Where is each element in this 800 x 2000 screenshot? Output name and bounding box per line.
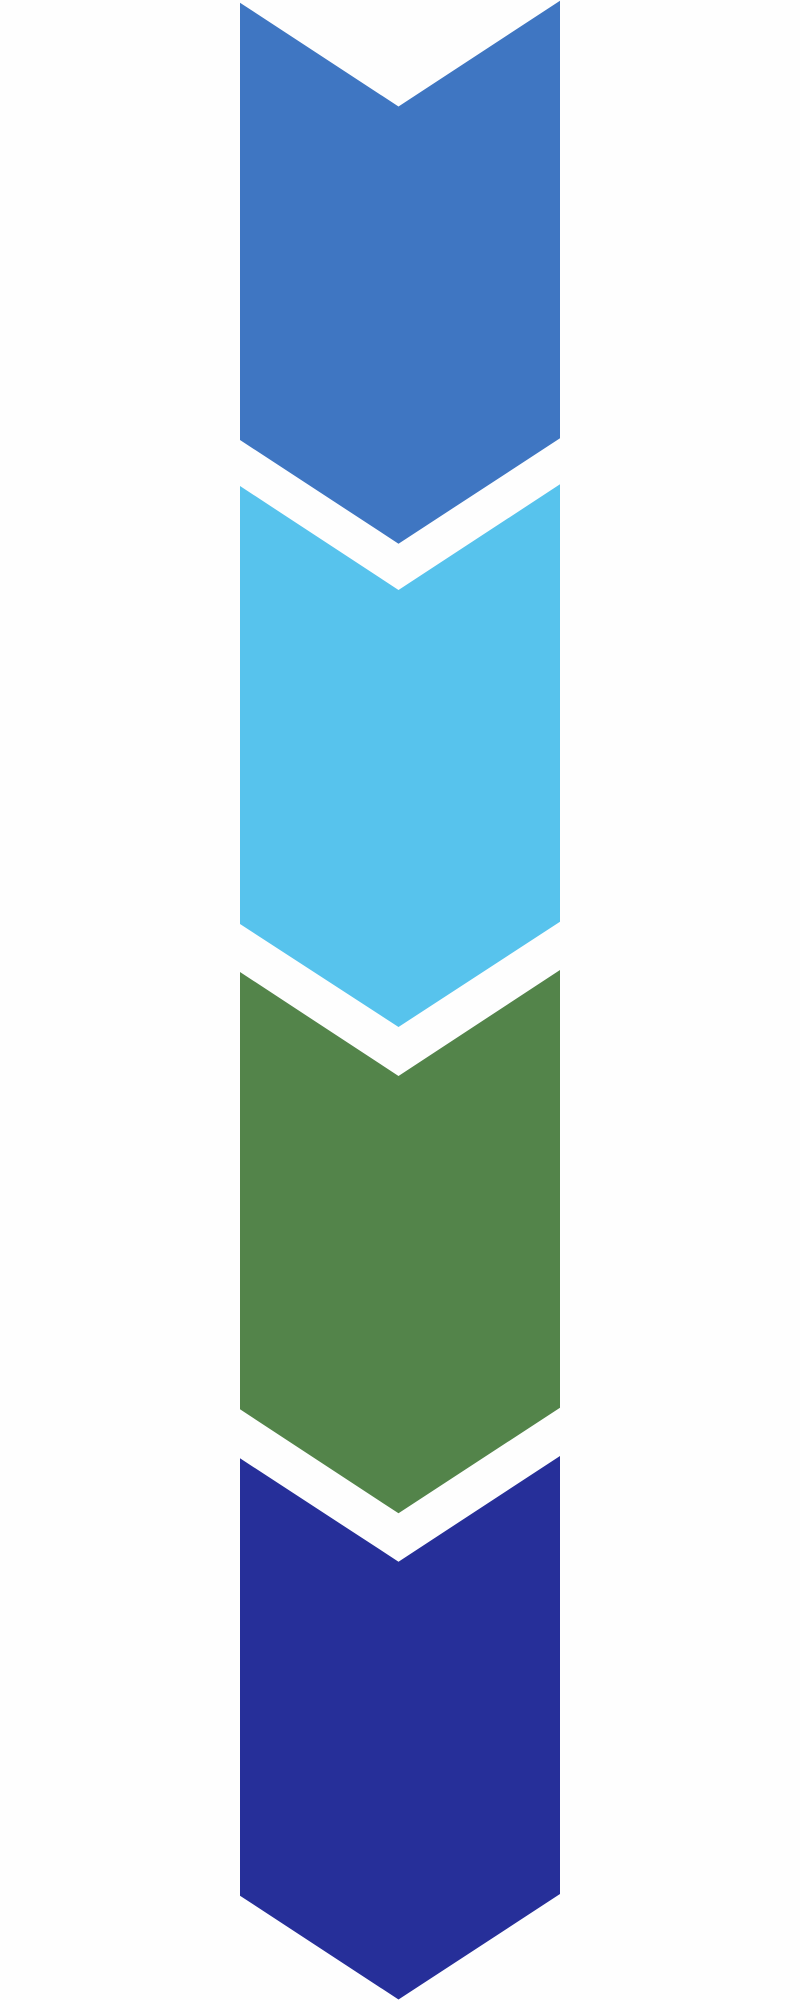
chevron 4: navy [240, 1456, 560, 2000]
chevron 2: sky blue [240, 484, 560, 1027]
chevron 3: green [240, 970, 560, 1513]
chevron 1: medium blue [240, 1, 560, 544]
